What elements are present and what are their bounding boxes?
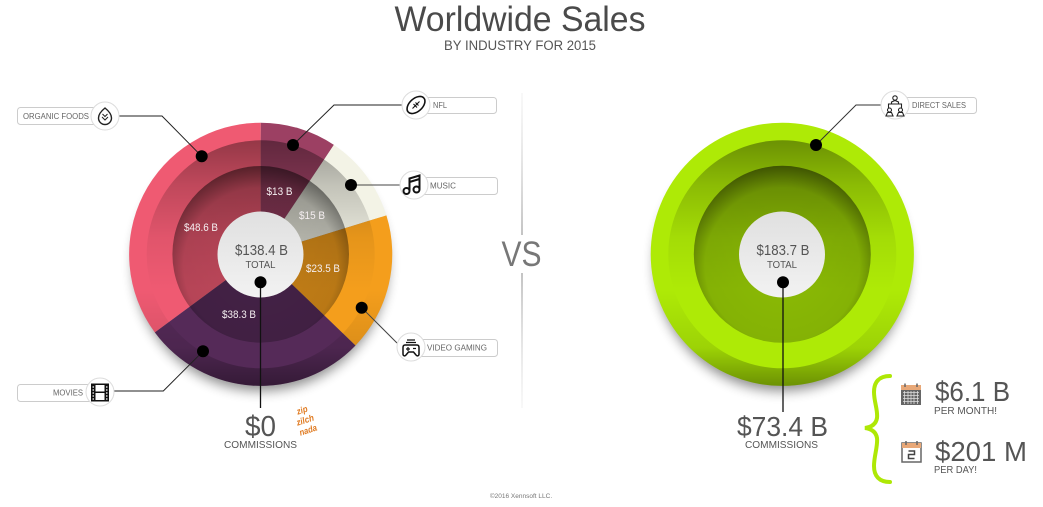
callout: movies: MOVIES — [53, 388, 83, 398]
slice: movies — [155, 254, 356, 386]
copyright footer: ©2016 Xennsoft LLC. — [490, 492, 552, 500]
VS divider: VS — [502, 235, 542, 274]
right total — [756, 242, 810, 271]
callout: NFL: NFL — [433, 101, 447, 110]
slice values: $38.3 B — [222, 309, 256, 321]
hub — [739, 212, 825, 298]
icon: people hierarchy — [886, 96, 904, 116]
slice: NFL — [261, 123, 334, 254]
right commissions value: COMMISSIONS — [745, 439, 818, 451]
callout: organic foods: ORGANIC FOODS — [23, 112, 89, 121]
per day stat: $201 M — [935, 436, 1027, 467]
callout: music: MUSIC — [430, 182, 456, 190]
callout: video gaming: VIDEO GAMING — [427, 344, 487, 352]
right donut chart: direct sales — [651, 123, 914, 391]
icon: day calendar — [902, 441, 921, 462]
slice values: $48.6 B — [184, 222, 218, 234]
left commissions value — [224, 411, 297, 451]
right commissions value: $73.4 B — [737, 411, 828, 442]
title: Worldwide Sales — [394, 0, 646, 39]
slice: music — [261, 145, 386, 254]
left total: TOTAL — [246, 259, 276, 271]
left commissions value: COMMISSIONS — [224, 439, 297, 451]
per day stat: PER DAY! — [934, 465, 977, 476]
icon: film strip — [91, 384, 109, 402]
icon: music notes — [404, 176, 420, 194]
per month stat: PER MONTH! — [934, 406, 997, 417]
handwritten note: zip zilch nada: nada — [298, 423, 318, 438]
subtitle: BY INDUSTRY FOR 2015 — [444, 38, 596, 53]
left donut chart: industries — [129, 123, 392, 391]
per month stat: $6.1 B — [935, 376, 1010, 407]
left commissions pointer — [254, 276, 266, 408]
slice: video gaming — [261, 215, 392, 346]
right total: $183.7 B — [756, 242, 810, 259]
handwritten note: zip zilch nada — [294, 404, 318, 438]
right total: TOTAL — [767, 259, 797, 271]
callout: organic foods — [18, 102, 208, 162]
callout: movies — [18, 345, 209, 406]
callout: music — [345, 171, 498, 199]
icon: month calendar — [901, 384, 921, 405]
right commissions pointer — [777, 276, 789, 412]
callout: video gaming — [356, 302, 498, 361]
slice values: $23.5 B — [306, 263, 340, 275]
green brace — [865, 376, 890, 482]
slice values — [184, 186, 340, 321]
slice: organic foods — [129, 123, 261, 332]
icon: game controller — [403, 340, 419, 356]
icon: leaf drop — [98, 108, 112, 124]
callout: direct sales — [810, 91, 976, 151]
handwritten note: zip zilch nada: zip — [294, 404, 309, 417]
hub — [218, 212, 304, 298]
handwritten note: zip zilch nada: zilch — [294, 412, 316, 428]
left total — [235, 242, 288, 271]
slice values: $15 B — [299, 210, 325, 222]
left commissions value: $0 — [245, 411, 276, 443]
left total: $138.4 B — [235, 242, 288, 259]
slice values: $13 B — [266, 186, 292, 198]
icon: football — [404, 93, 428, 117]
callout: NFL — [287, 91, 496, 151]
callout: direct sales: DIRECT SALES — [912, 101, 966, 110]
